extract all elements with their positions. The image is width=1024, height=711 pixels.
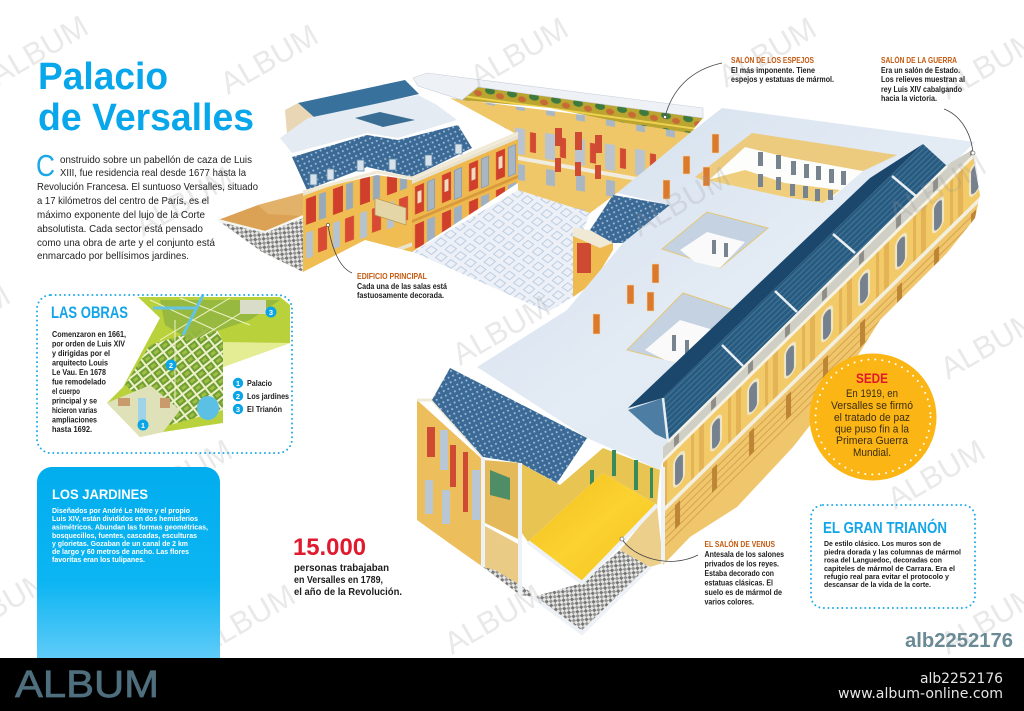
callout circle: sede: que puso fin a la (835, 424, 910, 436)
watermark: ALBUM (129, 159, 239, 243)
title: de Versalles (38, 97, 254, 139)
white pillars (483, 457, 663, 633)
intro paragraph: XIII, fue residencia real desde 1677 hasta la (60, 167, 246, 179)
body text (52, 506, 208, 564)
callout: edificio principal: EDIFICIO PRINCIPAL (357, 272, 427, 281)
image id: alb2252176 (905, 630, 1013, 652)
dotted border (37, 295, 292, 453)
body text: principal y se (52, 396, 97, 406)
main building front face (412, 135, 518, 252)
body text: bosquecillos, fuentes, cascadas, esculturas (52, 531, 197, 540)
legend: El Trianón (247, 405, 282, 414)
body text: por orden de Luis XIV (52, 340, 126, 348)
watermark: ALBUM (882, 147, 992, 231)
left block cornice (417, 400, 483, 457)
chimneys (593, 134, 719, 334)
body text: fue remodelado (52, 378, 106, 386)
body text: ampliaciones (52, 416, 97, 424)
heading: LAS OBRAS (51, 303, 128, 322)
bottom checker floor (533, 550, 650, 633)
watermark: ALBUM (464, 10, 574, 94)
legend: 3 (236, 405, 240, 414)
white roof of main building (280, 95, 457, 153)
back blue roof (298, 80, 419, 118)
body text: Diseñados por André Le Nôtre y el propio (52, 506, 190, 515)
back facade (450, 98, 700, 213)
callout circle: sede: Primera Guerra (836, 435, 909, 447)
callout: el salón de venus: estatuas clásicas. El (704, 578, 773, 588)
body text: hasta 1692. (52, 425, 92, 434)
title: Palacio (38, 56, 168, 98)
callout: el salón de venus: Antesala de los salones (704, 550, 784, 559)
illustration: palace cutaway (218, 73, 980, 633)
dormers (310, 144, 462, 185)
panel: las obras (37, 295, 292, 453)
roof courtyard 1 (695, 133, 897, 203)
callout: el salón de venus: varios colores. (704, 598, 754, 606)
left block facade (417, 400, 483, 567)
main building left face (303, 175, 412, 272)
callout: salón de la guerra: Era un salón de Estado. (881, 66, 960, 75)
legend (233, 378, 289, 414)
panel: los jardines (37, 467, 220, 658)
watermark: ALBUM (128, 432, 238, 516)
legend: Los jardines (247, 392, 289, 401)
body text: De estilo clásico. Los muros son de (824, 539, 941, 548)
callout: salón de los espejos (663, 56, 834, 119)
legend: 1 (236, 379, 240, 388)
body text: capiteles de mármol de Carrara. Era el (824, 564, 955, 573)
map markers (138, 306, 276, 430)
callout: salón de los espejos: espejos y estatuas de mármol. (731, 75, 834, 84)
body text: el cuerpo (52, 387, 80, 396)
callout circle: sede: En 1919, en (846, 388, 898, 400)
stat: 15.000: 15.000 (293, 534, 366, 561)
roof courtyard 3 (627, 293, 758, 367)
body text (52, 330, 126, 434)
callout: el salón de venus: suelo es de mármol de (704, 588, 782, 597)
main large roof (477, 108, 975, 470)
watermark: ALBUM (626, 159, 736, 243)
balcony of main building (375, 198, 406, 225)
intro paragraph: onstruido sobre un pabellón de caza de Luis (60, 154, 252, 166)
callout circle: sede (810, 354, 936, 480)
body text: de largo y 60 metros de ancho. Las flores (52, 547, 189, 556)
body text: Comenzaron en 1661, (52, 330, 126, 339)
drop cap: C (36, 148, 55, 183)
callout: salón de los espejos: El más imponente. Tiene (731, 66, 815, 75)
callout circle: sede: Versalles se firmó (831, 400, 913, 412)
marble courtyard (413, 190, 590, 312)
callout circle: sede: Mundial. (853, 447, 891, 459)
body text: hicieron varias (52, 406, 97, 415)
heading: EL GRAN TRIANÓN (823, 518, 947, 537)
watermark: ALBUM (712, 10, 822, 94)
upper white roofline (413, 73, 703, 118)
watermark: ALBUM (214, 17, 324, 101)
callout: salón de la guerra: hacia la victoria. (881, 94, 937, 103)
body text: asimétricos. Abundan las formas geométricas, (52, 522, 208, 532)
callout: el salón de venus: Estaba decorado con (704, 569, 774, 578)
small pavilion (573, 195, 670, 297)
panel: el gran trianón (811, 505, 975, 608)
callout: edificio principal: fastuosamente decorada. (357, 291, 444, 300)
body text: descansar de la vida de la corte. (824, 580, 931, 589)
body text: favoritas eran los tulipanes. (52, 555, 145, 564)
left terrace and checker floor (218, 193, 303, 272)
body text: Luis XIV, están divididos en dos hemisferios (52, 514, 198, 523)
footer id: alb2252176 (920, 671, 1003, 687)
body text: Le Vau. En 1678 (52, 368, 106, 377)
callout: edificio principal: Cada una de las salas está (357, 282, 447, 291)
callout circle: sede: SEDE (856, 370, 888, 386)
callout: el salón de venus (620, 537, 784, 606)
map markers: 2 (169, 361, 173, 370)
venus room walls (483, 448, 660, 595)
body text: y dirigidas por el (52, 349, 110, 358)
title (38, 56, 254, 139)
skylight (355, 112, 415, 127)
intro paragraph: a 17 kilómetros del centro de París, es el (37, 195, 209, 207)
body text: piedra dorada y las columnas de mármol (824, 548, 961, 556)
heading: LOS JARDINES (52, 486, 148, 502)
footer logo: ALBUM (15, 664, 159, 706)
hall of mirrors ceiling (462, 87, 703, 133)
map markers: 1 (141, 421, 145, 430)
watermark: ALBUM (881, 432, 991, 516)
watermark: ALBUM (438, 577, 548, 661)
callout: el salón de venus: EL SALÓN DE VENUS (704, 540, 776, 549)
intro paragraph: máximo exponente del lujo de la Corte (37, 209, 205, 221)
body text: y glorietas. Gozaban de un canal de 2 km (52, 539, 188, 548)
callout: salón de los espejos: SALÓN DE LOS ESPEJOS (731, 56, 815, 65)
intro paragraph: enmarcado por bellísimos jardines. (37, 250, 189, 262)
stat: 15.000: personas trabajaban (294, 562, 389, 574)
body text (824, 539, 961, 589)
stat: 15.000: el año de la Revolución. (294, 586, 402, 598)
legend: Palacio (247, 379, 272, 388)
map of gardens (107, 295, 290, 437)
intro paragraph (37, 154, 258, 262)
watermark: ALBUM (191, 577, 301, 661)
callout: salón de la guerra: Los relieves muestran al (881, 75, 965, 84)
callout circle: sede: el tratado de paz (834, 412, 910, 424)
map markers: 3 (269, 308, 273, 317)
legend: 2 (236, 392, 240, 401)
venus yellow floor (528, 473, 657, 583)
intro text (36, 148, 258, 262)
footer bar (0, 658, 1024, 711)
facade right wing (663, 150, 980, 565)
slate roofs right wing (628, 144, 947, 442)
callout: edificio principal (326, 223, 447, 300)
roof courtyard 2 (662, 212, 768, 268)
callout: salón de la guerra: SALÓN DE LA GUERRA (881, 56, 957, 65)
panel background (37, 467, 220, 658)
body text: refugio real para evitar el protocolo y (824, 572, 950, 581)
left block slate roof (432, 368, 587, 483)
slate roof of main building (292, 125, 472, 190)
footer url: www.album-online.com (838, 686, 1003, 702)
intro paragraph: como una obra de arte y el conjunto está (37, 237, 215, 249)
intro paragraph: Revolución Francesa. El suntuoso Versalles, situado (37, 181, 258, 193)
body text: rosa del Languedoc, decoradas con (824, 556, 942, 564)
intro paragraph: absolutista. Cada sector está pensado (37, 223, 203, 235)
body text: arquitecto Louis (52, 358, 108, 368)
callout: salón de la guerra (881, 56, 975, 155)
stat: 15.000 (293, 534, 402, 598)
stat: 15.000: en Versalles en 1789, (294, 574, 383, 586)
central red panels of back facade (555, 128, 602, 179)
watermark: ALBUM (446, 288, 556, 372)
callout: salón de la guerra: rey Luis XIV cabalgando (881, 85, 962, 94)
cornice of main building (303, 133, 518, 192)
callout: el salón de venus: privados de los reyes. (704, 560, 779, 568)
